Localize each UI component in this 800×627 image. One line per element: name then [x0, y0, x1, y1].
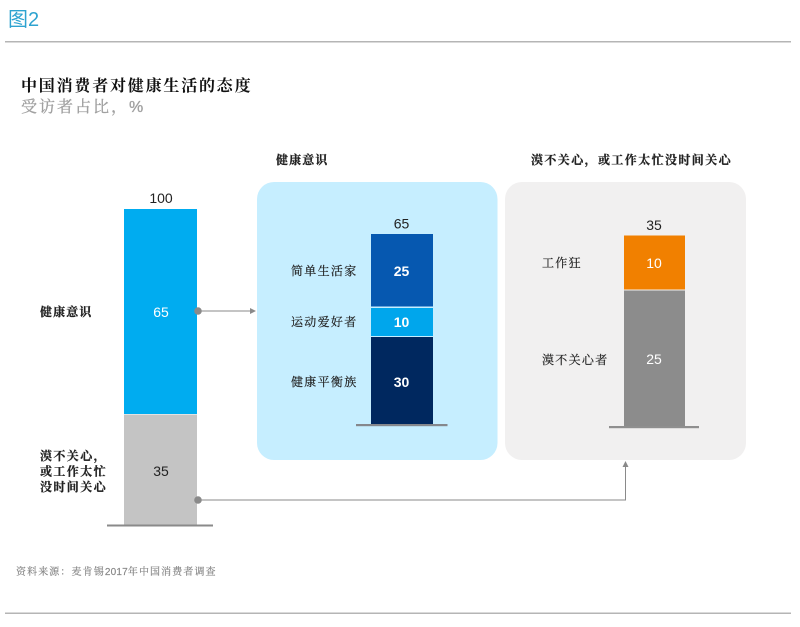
- title: 中国消费者对健康生活的态度: [21, 76, 252, 95]
- label: workaholic: 工作狂: [542, 256, 582, 270]
- arrow: to health conscious panel: [194, 307, 256, 315]
- main stacked bar: 35: [153, 463, 169, 479]
- heading: health conscious panel: 健康意识: [276, 152, 328, 167]
- label: indifferent or too busy: 或工作太忙: [40, 464, 107, 478]
- arrow: to indifferent panel: [194, 461, 628, 504]
- panel: health conscious: [257, 182, 498, 460]
- stacked bar: health segments: 30: [394, 374, 409, 390]
- label: indifferent or too busy: [40, 448, 108, 494]
- label: simple lifestyle: 简单生活家: [291, 263, 358, 278]
- label: health conscious: 健康意识: [40, 304, 92, 319]
- stacked bar: health segments: 10: [394, 314, 409, 330]
- main stacked bar: 100: [149, 190, 173, 206]
- source note: 资料来源：麦肯锡2017年中国消费者调查: [16, 565, 217, 578]
- label: indifferent people: 漠不关心者: [542, 352, 609, 367]
- stacked bar: health segments: 25: [394, 263, 409, 279]
- panel: indifferent or too busy: [505, 182, 746, 460]
- main stacked bar: 65: [153, 304, 169, 320]
- stacked bar: indifferent segments: 25: [646, 351, 662, 367]
- stacked bar: indifferent segments: 35: [646, 217, 662, 233]
- heading: indifferent panel: 漠不关心，或工作太忙没时间关心: [531, 152, 733, 167]
- label: sports lovers: 运动爱好者: [291, 314, 358, 329]
- label: indifferent or too busy: 漠不关心，: [40, 448, 107, 463]
- main stacked bar: [107, 190, 213, 526]
- stacked bar: indifferent segments: [609, 217, 699, 428]
- subtitle: 受访者占比，%: [21, 98, 145, 116]
- figure label: 图2: [8, 9, 39, 31]
- label: indifferent or too busy: 没时间关心: [40, 479, 108, 494]
- stacked bar: indifferent segments: 10: [646, 255, 662, 271]
- label: health balancers: 健康平衡族: [291, 374, 358, 389]
- stacked bar: health segments: [356, 216, 448, 426]
- stacked bar: health segments: 65: [394, 216, 409, 232]
